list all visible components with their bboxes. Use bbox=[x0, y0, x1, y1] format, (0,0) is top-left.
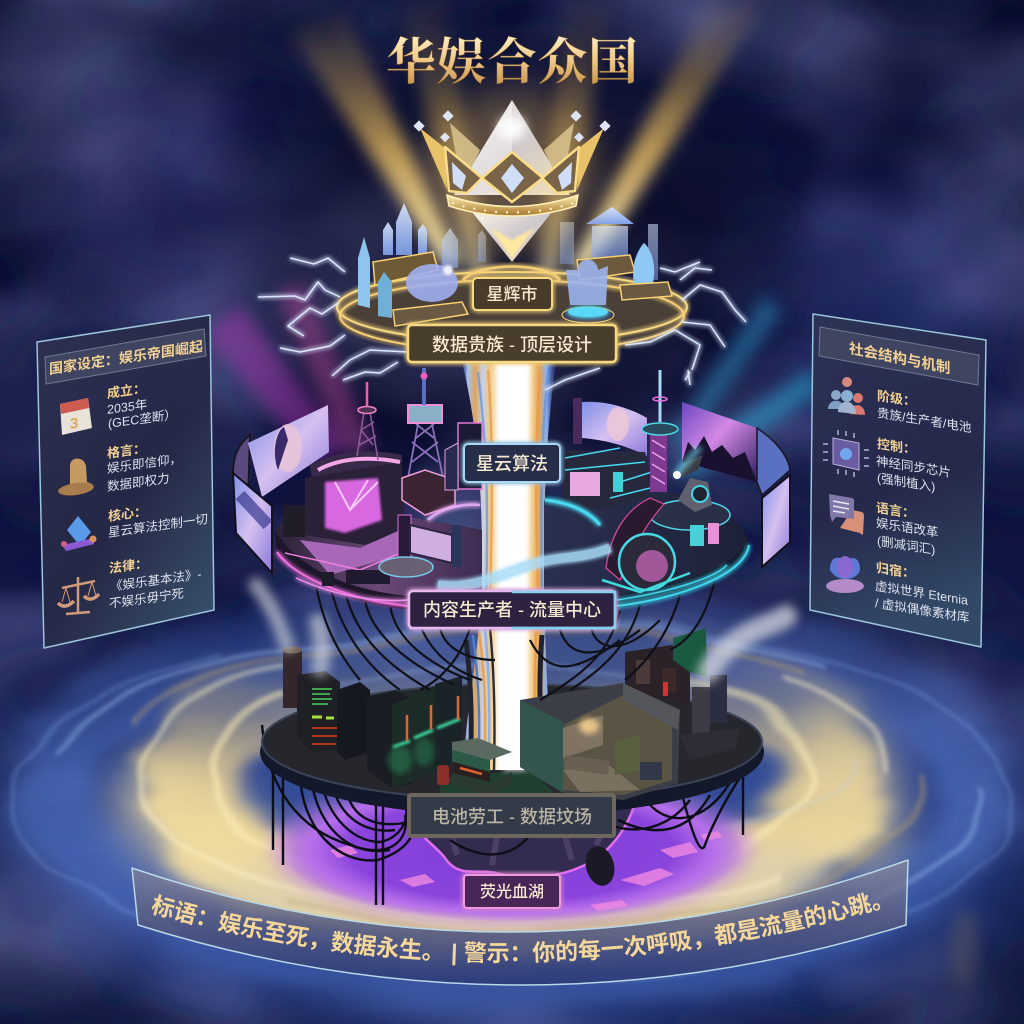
icon: crystal spires bbox=[358, 237, 392, 318]
text: motto: 娱乐即信仰， bbox=[107, 452, 182, 476]
icon: crystal lotus bbox=[826, 556, 864, 593]
text: control bbox=[876, 435, 951, 494]
label: content producers: 内容生产者 - 流量中心 bbox=[423, 600, 601, 620]
crown bbox=[413, 90, 611, 262]
banner: slogan and warning: 标语：娱乐至死，数据永生。 | 警示：你的每一次呼吸，都是流量的心跳。 bbox=[152, 892, 880, 966]
icon: cyan boxes bbox=[690, 523, 719, 546]
icon: plinth right bbox=[577, 255, 635, 280]
panel heading: 社会结构与机制 bbox=[849, 339, 950, 377]
label: nebula algorithm: 星云算法 bbox=[476, 454, 548, 474]
text: control: (强制植入) bbox=[877, 471, 935, 494]
icon: flowing light road bbox=[428, 500, 610, 586]
icon: plinth lower left bbox=[393, 302, 468, 326]
text: founded bbox=[107, 381, 177, 431]
panel heading bbox=[45, 329, 206, 384]
panel: social structure bbox=[810, 314, 986, 647]
label: nebula algorithm bbox=[464, 444, 560, 482]
floating rock underside bbox=[405, 800, 636, 877]
icon: people bbox=[828, 377, 865, 415]
text: motto bbox=[107, 441, 182, 494]
text: founded: (GEC垄断） bbox=[108, 407, 177, 431]
icon: crystal towers left bbox=[383, 203, 486, 268]
icon: chip bbox=[823, 430, 869, 477]
icon: right stage bbox=[563, 448, 652, 510]
icon: scales bbox=[58, 577, 99, 614]
icon: idol hologram bbox=[562, 260, 614, 323]
banner: slogan and warning bbox=[131, 859, 909, 986]
neon rims bbox=[277, 545, 749, 606]
icon: smokestacks left bbox=[282, 646, 302, 708]
steam plumes bbox=[256, 585, 786, 672]
label: star city bbox=[473, 278, 552, 310]
icon: sign and small screen bbox=[398, 515, 461, 567]
text: founded: 成立： bbox=[107, 381, 146, 401]
cables between tiers bbox=[315, 580, 715, 700]
icon: plinth left bbox=[373, 252, 438, 285]
text: law: 不娱乐毋宁死 bbox=[109, 587, 184, 611]
text: law: 《娱乐基本法》- bbox=[110, 567, 202, 594]
icon: crystal temple bbox=[560, 207, 658, 280]
icon: speech bubbles bbox=[829, 494, 864, 535]
top tier: star city platform bbox=[336, 203, 688, 354]
icon: broadcast tower small bbox=[357, 382, 378, 460]
hanging cables and legs bbox=[262, 725, 752, 905]
icon: neon tower bbox=[642, 370, 678, 492]
middle tier: content producer platform bbox=[275, 368, 749, 610]
text: language bbox=[876, 499, 938, 557]
icon: server racks bbox=[297, 671, 462, 788]
text: control: 控制： bbox=[877, 435, 916, 457]
icon: camera bbox=[650, 447, 730, 530]
text: class bbox=[877, 387, 972, 435]
label: star city: 星辉市 bbox=[486, 285, 538, 304]
label: data aristocrats bbox=[408, 325, 616, 362]
panel: national setting bbox=[37, 315, 214, 648]
icon: equipment boxes bbox=[437, 738, 512, 796]
text: founded: 2035年 bbox=[107, 397, 147, 417]
bottom tier: machinery bbox=[282, 628, 740, 800]
icon: monument bbox=[57, 458, 95, 497]
icon: calendar: 3 bbox=[70, 415, 78, 433]
bottom tier: platform disc bbox=[260, 684, 764, 816]
panel heading: 国家设定：娱乐帝国崛起 bbox=[49, 338, 203, 377]
icon: crystal bust bbox=[620, 243, 672, 300]
purple and teal side beams bbox=[205, 285, 820, 480]
text: class: 贵族/生产者/电池 bbox=[877, 406, 972, 435]
text: destination: 归宿： bbox=[876, 559, 915, 581]
middle tier: curved screens bbox=[233, 398, 790, 573]
text: language: (删减词汇) bbox=[877, 534, 935, 557]
text: core: 星云算法控制一切 bbox=[108, 512, 208, 540]
label: fluorescent lake: 荧光血湖 bbox=[480, 883, 544, 901]
label: fluorescent lake bbox=[464, 875, 560, 908]
text: control: 神经同步芯片 bbox=[876, 454, 951, 480]
text: destination: 虚拟世界 Eternia bbox=[875, 579, 968, 608]
icon: back machine rooms bbox=[625, 628, 707, 705]
bottom tier: fluorescent blood lake bbox=[272, 772, 752, 924]
icon: crystal core bbox=[61, 516, 96, 551]
panel heading bbox=[819, 327, 979, 385]
text: core: 核心： bbox=[108, 504, 147, 524]
icon: smokestacks right bbox=[680, 675, 740, 760]
text: law: 法律： bbox=[109, 556, 148, 576]
icon: film reel gear bbox=[602, 498, 690, 592]
golden spotlight beams bbox=[290, 0, 766, 280]
energy vortex swirl bbox=[12, 610, 1012, 990]
text: language: 娱乐语改革 bbox=[876, 516, 938, 540]
icon: base building bbox=[402, 423, 482, 515]
text: language: 语言： bbox=[876, 499, 915, 521]
text: motto: 数据即权力 bbox=[107, 470, 169, 494]
icon: left stage bbox=[283, 451, 410, 586]
title: 华娱合众国 bbox=[386, 34, 638, 90]
lightning arcs bbox=[258, 258, 746, 390]
text: destination bbox=[875, 559, 969, 625]
icon: worker dormitory bbox=[520, 683, 680, 800]
label: content producers bbox=[409, 591, 615, 628]
label: battery workers bbox=[409, 795, 614, 836]
text: destination: / 虚拟偶像素材库 bbox=[875, 595, 969, 625]
icon: broadcast tower large bbox=[408, 368, 443, 478]
label: battery workers: 电池劳工 - 数据坟场 bbox=[432, 807, 592, 827]
text: law bbox=[109, 556, 202, 611]
icon: crystal cluster bbox=[406, 264, 458, 302]
central data beam bbox=[462, 362, 556, 770]
icon: calendar bbox=[60, 398, 92, 435]
text: class: 阶级： bbox=[877, 387, 916, 409]
label: data aristocrats: 数据贵族 - 顶层设计 bbox=[432, 335, 592, 355]
icon: round stage bbox=[379, 557, 433, 577]
text: motto: 格言： bbox=[107, 441, 146, 461]
